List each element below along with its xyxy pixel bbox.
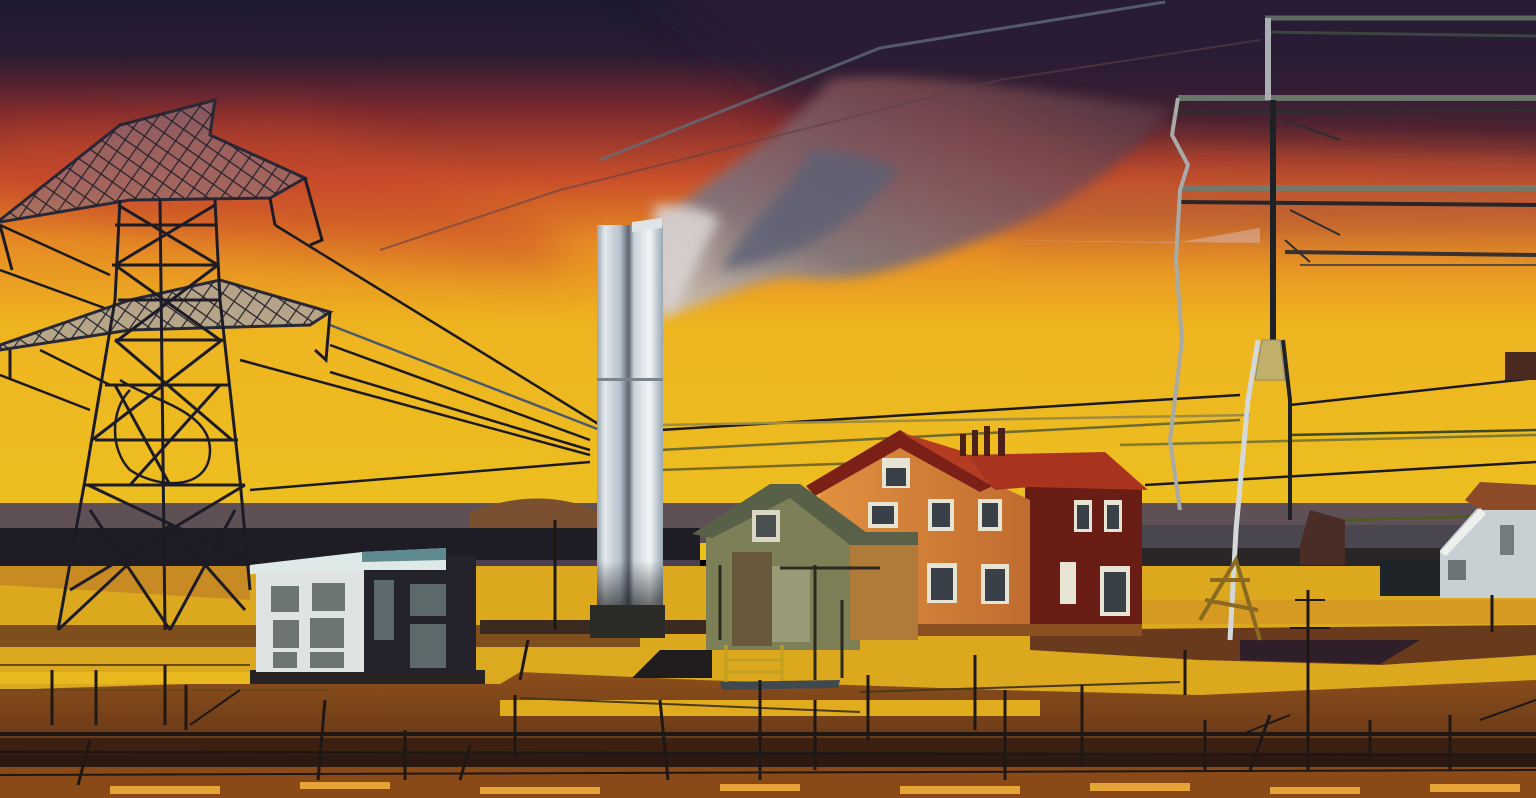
sky background: [0, 0, 1536, 560]
icon: right transmission pylon: [1170, 18, 1536, 640]
smoke plume: [380, 2, 1260, 318]
power lines from pylon to stack: [0, 225, 1536, 520]
horizon and distant land: [0, 498, 1536, 630]
small distant houses on the right: [1300, 352, 1536, 598]
large orange and red house: [806, 426, 1148, 636]
ground: [0, 566, 1536, 798]
small white-and-dark building: [250, 548, 485, 684]
icon: left transmission pylon: [0, 100, 330, 630]
smokestack tower: [590, 218, 665, 638]
small olive green house: [632, 484, 918, 690]
fences in the foreground: [0, 520, 1536, 785]
